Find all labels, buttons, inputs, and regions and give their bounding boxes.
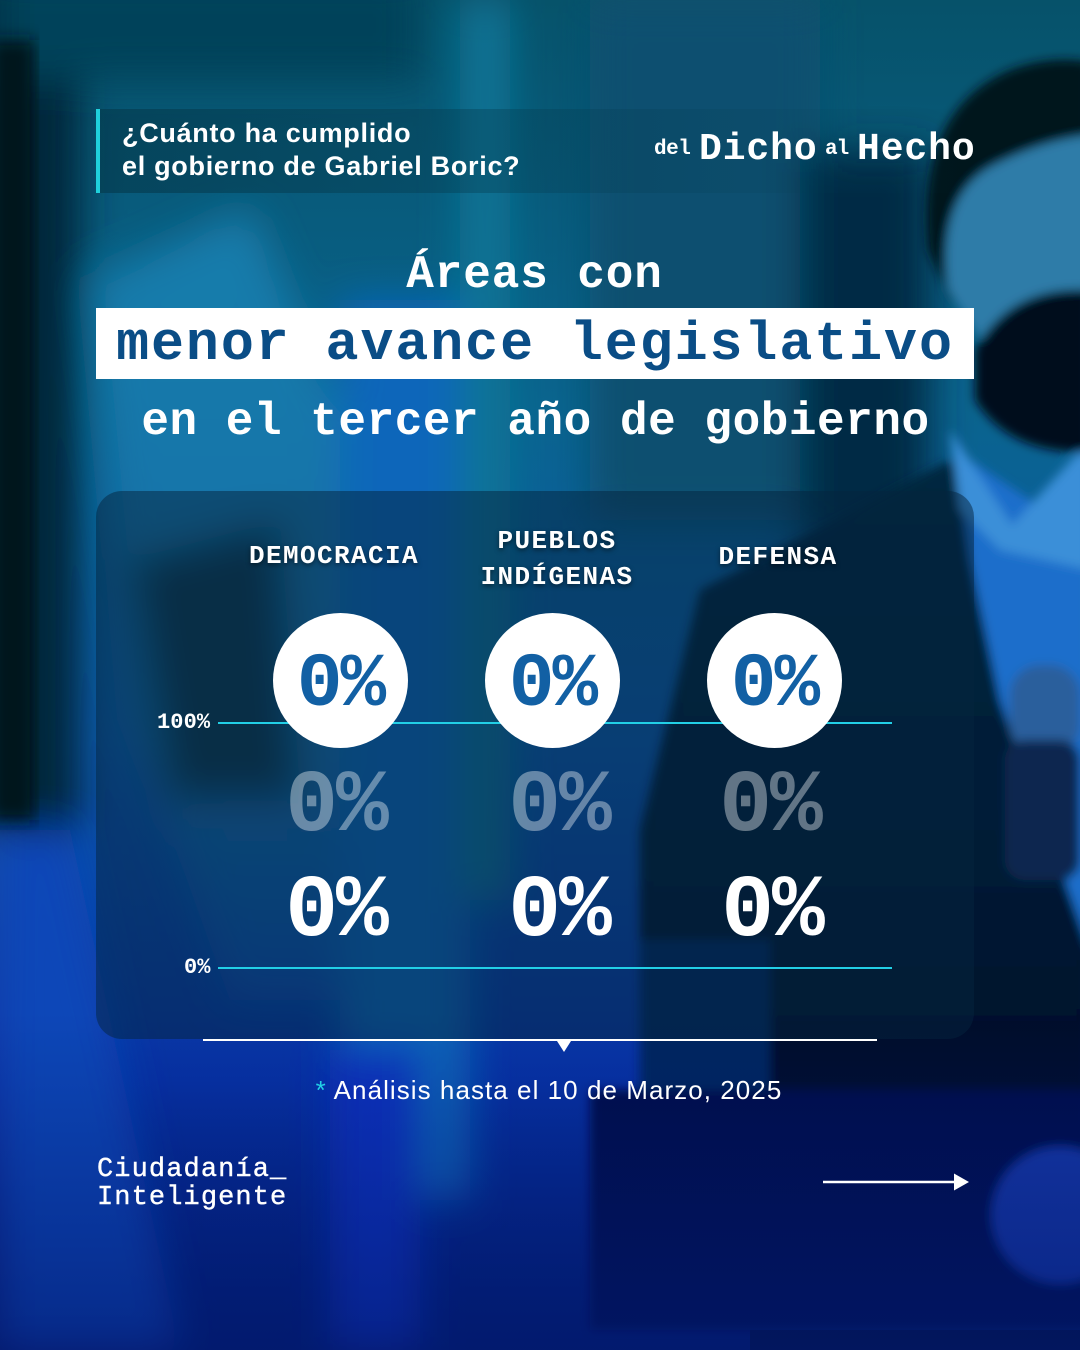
header question bbox=[122, 118, 520, 181]
title highlight: menor avance legislativo bbox=[116, 313, 954, 376]
header question: ¿Cuánto ha cumplido bbox=[122, 118, 411, 148]
column label: Pueblos Indígenas: PUEBLOS bbox=[497, 526, 617, 556]
column label: Defensa: DEFENSA bbox=[718, 542, 838, 572]
accent stripe bbox=[96, 109, 100, 193]
logo: del Dicho al Hecho bbox=[654, 128, 976, 171]
white value: Democracia: 0% bbox=[285, 863, 387, 962]
header bar bbox=[96, 109, 974, 193]
title line 3: en el tercer año de gobierno bbox=[141, 396, 930, 448]
column label: Pueblos Indígenas: INDÍGENAS bbox=[480, 562, 634, 592]
white value: Defensa: 0% bbox=[721, 863, 823, 962]
arrow bbox=[823, 1174, 969, 1190]
bottom rule with pointer bbox=[203, 1039, 877, 1052]
title line 1: Áreas con bbox=[406, 249, 663, 301]
logo: Ciudadanía Inteligente bbox=[97, 1155, 287, 1213]
circle value: Defensa: 0% bbox=[731, 642, 818, 728]
logo: Ciudadanía Inteligente: Ciudadanía_ bbox=[97, 1155, 287, 1185]
logo: Ciudadanía Inteligente: Inteligente bbox=[97, 1183, 287, 1213]
faded value: Defensa: 0% bbox=[719, 758, 821, 857]
circle value: Democracia bbox=[273, 613, 408, 748]
faded value: Pueblos Indígenas: 0% bbox=[508, 758, 610, 857]
circle value: Pueblos Indígenas: 0% bbox=[509, 642, 596, 728]
header question: el gobierno de Gabriel Boric? bbox=[122, 151, 520, 181]
footnote: * Análisis hasta el 10 de Marzo, 2025 bbox=[316, 1075, 782, 1105]
axis line 0% bbox=[218, 967, 892, 969]
circle value: Pueblos Indígenas bbox=[485, 613, 620, 748]
column label: Democracia: DEMOCRACIA bbox=[249, 541, 419, 571]
logo: del Dicho al Hecho: Hecho bbox=[857, 128, 976, 171]
axis line 100% bbox=[218, 722, 892, 724]
circle value: Democracia: 0% bbox=[297, 642, 384, 728]
man: suit, shirt, head bbox=[590, 60, 1080, 1330]
axis label 100%: 100% bbox=[157, 710, 210, 735]
axis label 0%: 0% bbox=[184, 955, 211, 980]
logo: del Dicho al Hecho: al bbox=[825, 138, 848, 161]
panel: chart bbox=[96, 491, 974, 1039]
circle value: Defensa bbox=[707, 613, 842, 748]
white value: Pueblos Indígenas: 0% bbox=[508, 863, 610, 962]
logo: del Dicho al Hecho: Dicho bbox=[699, 128, 818, 171]
faded value: Democracia: 0% bbox=[285, 758, 387, 857]
column label: Pueblos Indígenas bbox=[480, 526, 634, 592]
logo: del Dicho al Hecho: del bbox=[654, 138, 690, 161]
